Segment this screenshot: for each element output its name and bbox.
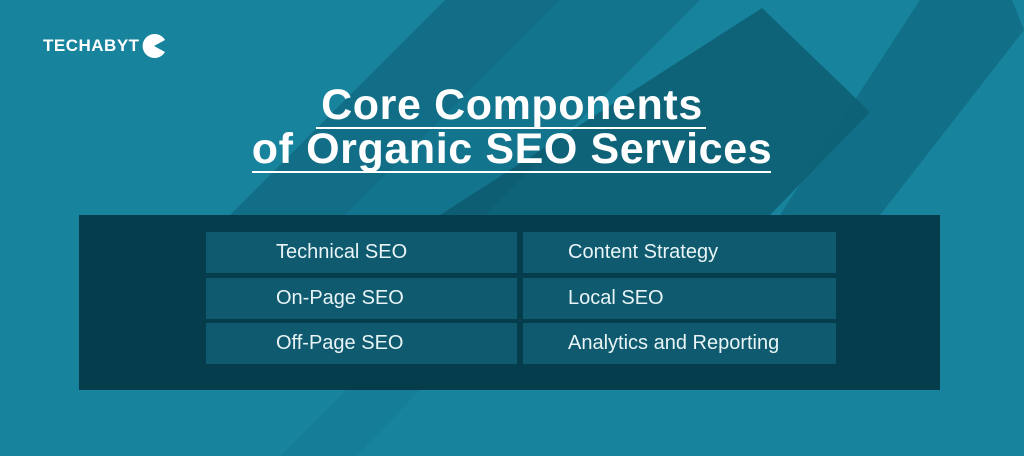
item: Local SEO: Local SEO xyxy=(568,287,664,309)
panel: components xyxy=(79,215,940,390)
text: Core Components xyxy=(321,81,703,129)
item: Analytics and Reporting: Analytics and Reporting xyxy=(568,332,779,354)
item: Content Strategy xyxy=(523,232,836,273)
item: Technical SEO xyxy=(206,232,517,273)
item: Off-Page SEO xyxy=(206,323,517,364)
title xyxy=(252,81,772,173)
logo xyxy=(43,34,165,58)
item: Off-Page SEO: Off-Page SEO xyxy=(276,332,403,354)
text: of Organic SEO Services xyxy=(252,125,772,173)
item: Local SEO xyxy=(523,278,836,319)
item: On-Page SEO: On-Page SEO xyxy=(276,287,404,309)
item: Technical SEO: Technical SEO xyxy=(276,241,407,263)
item: Content Strategy: Content Strategy xyxy=(568,241,718,263)
icon: pacman C xyxy=(142,34,165,58)
item: On-Page SEO xyxy=(206,278,517,319)
logo: TECHABYT xyxy=(43,36,140,55)
item: Analytics and Reporting xyxy=(523,323,836,364)
